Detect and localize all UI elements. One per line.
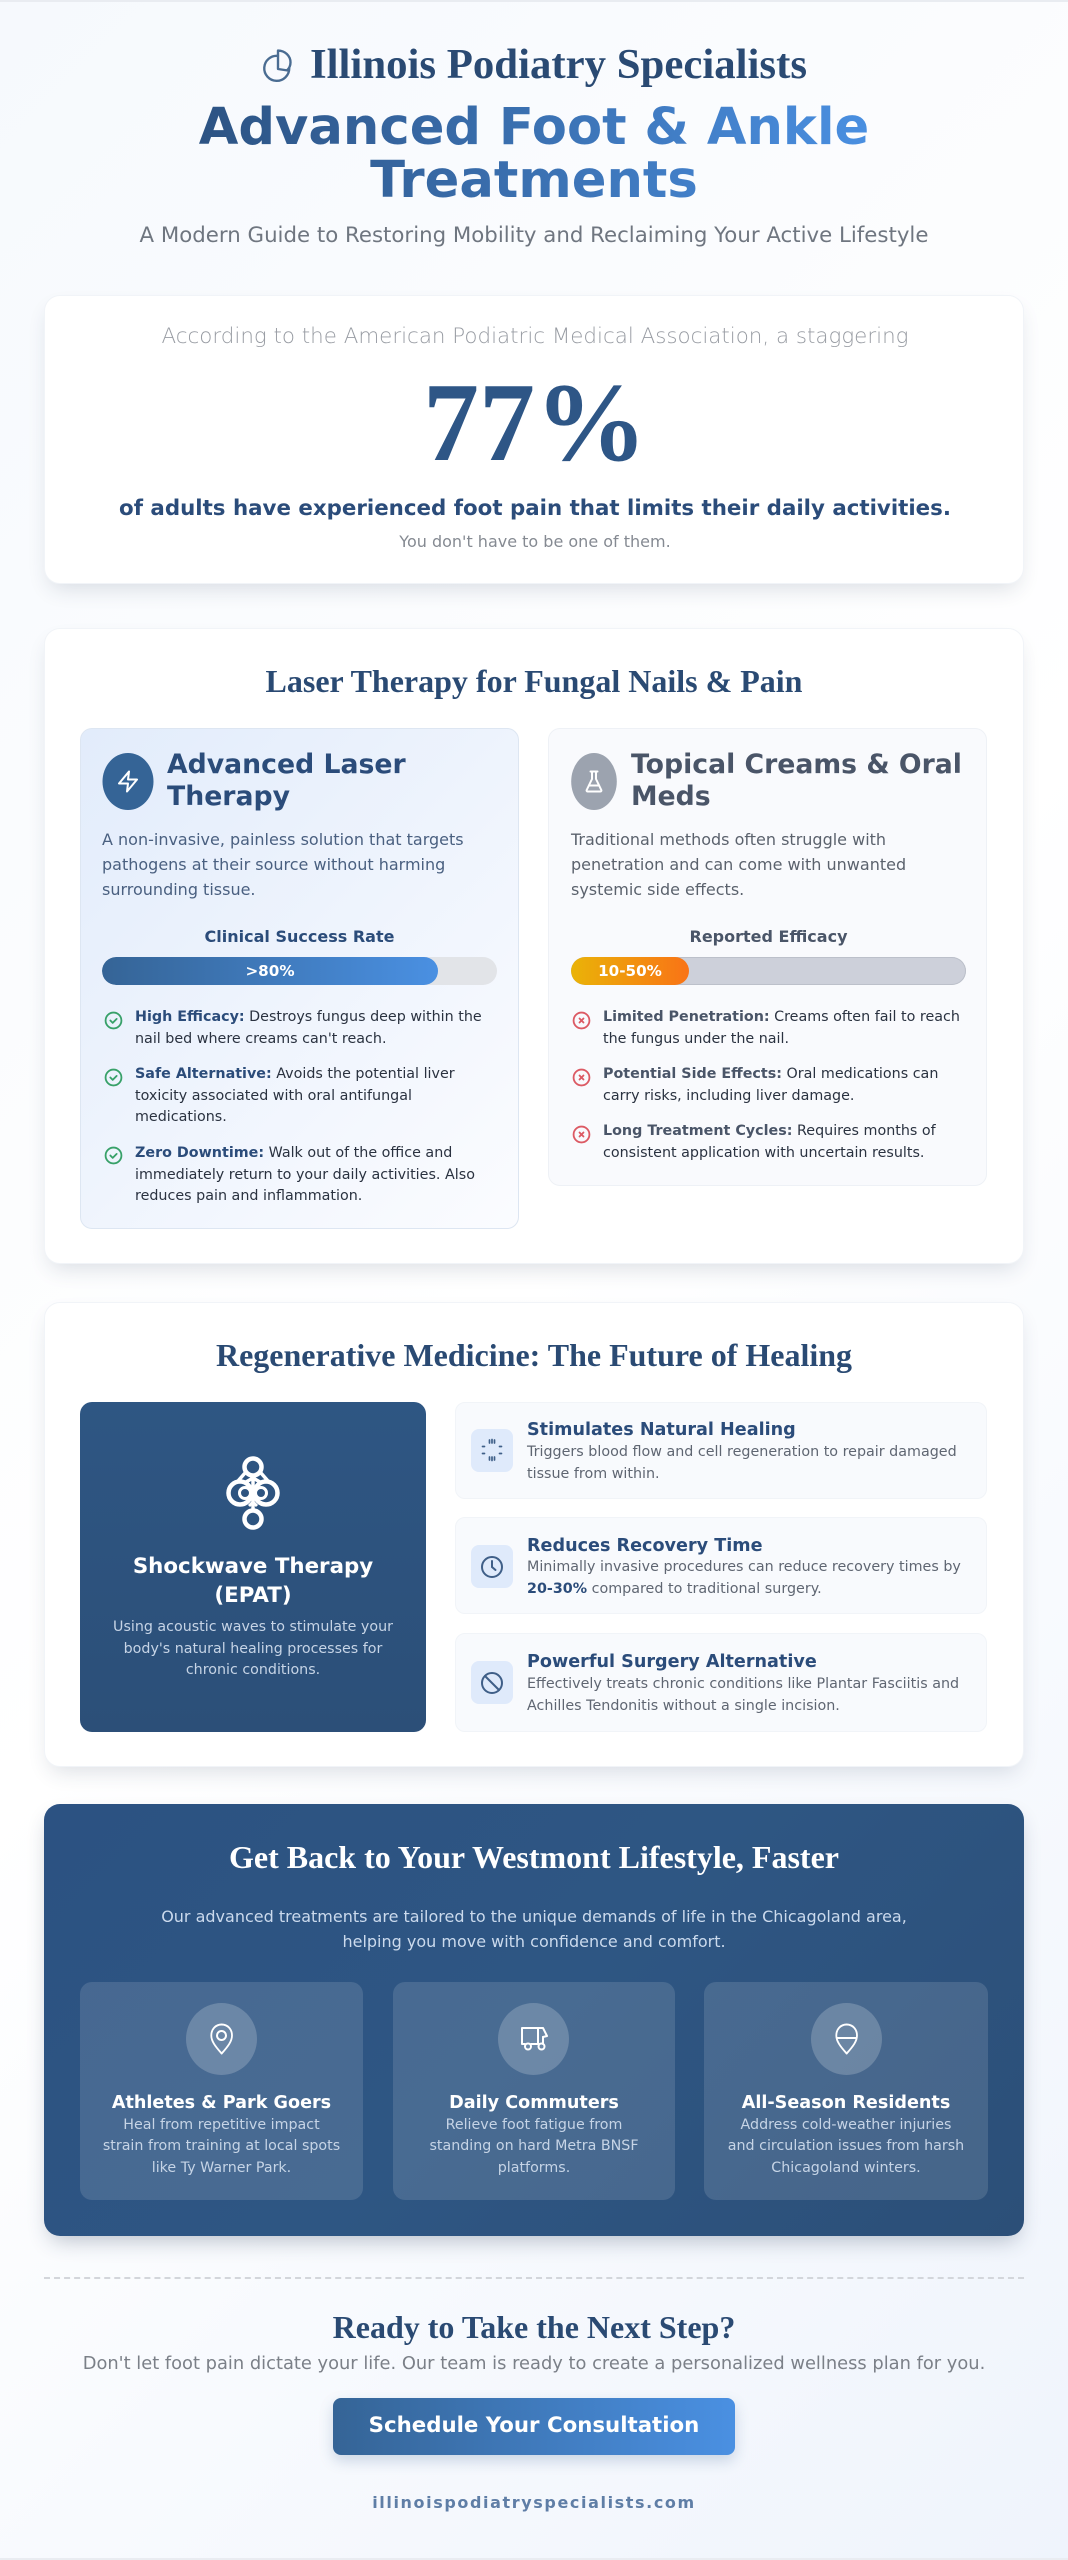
subtitle: A Modern Guide to Restoring Mobility and Reclaiming Your Active Lifestyle bbox=[140, 223, 928, 248]
text: zero downtime: Zero Downtime: Walk out of the office and bbox=[135, 1145, 452, 1161]
text: topical description bbox=[570, 830, 906, 899]
bar fill: 10-50% bbox=[571, 957, 689, 985]
text: residents title: All-Season Residents bbox=[742, 2093, 950, 2113]
main title: Advanced Foot & Ankle bbox=[199, 97, 869, 157]
icon: laser bolt bbox=[102, 753, 154, 810]
heading: shockwave therapy bbox=[133, 1554, 373, 1608]
text: healing description bbox=[526, 1444, 957, 1482]
text: shockwave description: body's natural healing processes for bbox=[124, 1641, 382, 1657]
text: long treatment cycles bbox=[603, 1123, 936, 1161]
icon: ban bbox=[471, 1661, 513, 1704]
text: surgery description: Achilles Tendonitis without a single incision. bbox=[527, 1698, 840, 1714]
text: topical description: Traditional methods often struggle with bbox=[571, 830, 886, 849]
heading: laser section: Laser Therapy for Fungal Nails & Pain bbox=[266, 663, 802, 699]
text: athletes description bbox=[103, 2117, 340, 2176]
text: shockwave description: chronic conditions. bbox=[186, 1662, 320, 1678]
main title bbox=[190, 101, 878, 206]
text: laser description: surrounding tissue. bbox=[102, 880, 256, 899]
text: potential side effects: carry risks, including liver damage. bbox=[603, 1088, 854, 1104]
text: safe alternative: medications. bbox=[135, 1109, 227, 1125]
heading: advanced laser: Advanced Laser bbox=[167, 749, 406, 780]
bar fill: over 80% bbox=[102, 957, 438, 985]
text: website: illinoispodiatryspecialists.com bbox=[372, 2493, 696, 2512]
panel: 77% statistic bbox=[44, 295, 1024, 584]
text: zero downtime: reduces pain and inflammation. bbox=[135, 1188, 362, 1204]
label: reported efficacy: Reported Efficacy bbox=[690, 927, 848, 946]
text: long treatment cycles: Long Treatment Cycles: Requires months of bbox=[603, 1123, 936, 1139]
text: residents description bbox=[728, 2117, 964, 2176]
text: limited penetration: the fungus under the nail. bbox=[603, 1031, 789, 1047]
text: limited penetration bbox=[603, 1009, 960, 1047]
icon: truck bbox=[498, 2003, 569, 2075]
text: high efficacy: nail bed where creams can't reach. bbox=[135, 1031, 387, 1047]
panel: powerful surgery alternative bbox=[455, 1633, 987, 1732]
text: athletes description: Heal from repetitive impact bbox=[123, 2117, 320, 2133]
bar: reported efficacy bbox=[571, 957, 966, 985]
text: long treatment cycles: consistent application with uncertain results. bbox=[603, 1145, 924, 1161]
stat note: You don't have to be one of them. bbox=[399, 532, 671, 551]
panel: topical creams and oral meds bbox=[548, 728, 987, 1186]
panel: commuters bbox=[393, 1982, 675, 2200]
text: high efficacy: High Efficacy: Destroys fungus deep within the bbox=[135, 1009, 482, 1025]
panel: athletes bbox=[80, 1982, 363, 2200]
big number: 77% bbox=[423, 361, 647, 485]
panel: advanced laser therapy bbox=[80, 728, 519, 1229]
text: laser description: A non-invasive, painless solution that targets bbox=[102, 830, 464, 849]
text: zero downtime: immediately return to your daily activities. Also bbox=[135, 1167, 475, 1183]
text: potential side effects bbox=[603, 1066, 938, 1104]
heading: regenerative medicine: Regenerative Medicine: The Future of Healing bbox=[216, 1337, 852, 1373]
text: residents description: Chicagoland winters. bbox=[771, 2160, 921, 2176]
text: commuters title: Daily Commuters bbox=[449, 2093, 619, 2113]
panel: shockwave therapy bbox=[80, 1402, 426, 1732]
text: high efficacy bbox=[135, 1009, 482, 1047]
panel: all-season residents bbox=[704, 1982, 988, 2200]
text: athletes description: strain from training at local spots bbox=[103, 2138, 340, 2154]
text: laser description: pathogens at their source without harming bbox=[102, 855, 445, 874]
text: westmont intro: helping you move with confidence and comfort. bbox=[342, 1932, 726, 1951]
text: recovery title: Reduces Recovery Time bbox=[527, 1536, 763, 1556]
stat caption: of adults have experienced foot pain that limits their daily activities. bbox=[119, 496, 951, 521]
text: athletes description: like Ty Warner Park. bbox=[152, 2160, 291, 2176]
panel: laser therapy section bbox=[44, 628, 1024, 1264]
stat intro: According to the American Podiatric Medical Association, a staggering bbox=[162, 324, 908, 349]
heading: advanced laser bbox=[167, 749, 406, 812]
icon: clock bbox=[471, 1545, 513, 1588]
panel: stimulates natural healing bbox=[455, 1402, 987, 1499]
icon: x 2 bbox=[572, 1068, 590, 1086]
icon: check 1 bbox=[104, 1012, 122, 1030]
text: zero downtime bbox=[135, 1145, 475, 1204]
panel: regenerative medicine section bbox=[44, 1302, 1024, 1767]
label: clinical success: Clinical Success Rate bbox=[205, 927, 394, 946]
button: schedule consultation: Schedule Your Consultation bbox=[369, 2413, 699, 2438]
text: athletes title: Athletes & Park Goers bbox=[112, 2093, 331, 2113]
text: limited penetration: Limited Penetration: Creams often fail to reach bbox=[603, 1009, 960, 1025]
heading: topical creams: Topical Creams & Oral bbox=[631, 749, 962, 780]
text: shockwave description: Using acoustic waves to stimulate your bbox=[113, 1619, 393, 1635]
text: commuters description: standing on hard Metra BNSF bbox=[429, 2138, 639, 2154]
heading: westmont: Get Back to Your Westmont Lifestyle, Faster bbox=[229, 1839, 839, 1875]
panel: reduces recovery time bbox=[455, 1517, 987, 1614]
icon: shockwave bbox=[226, 1456, 280, 1530]
text: commuters description: platforms. bbox=[498, 2160, 570, 2176]
text: topical description: systemic side effects. bbox=[571, 880, 744, 899]
button: schedule consultation bbox=[333, 2398, 735, 2455]
text: recovery description: 20-30% compared to traditional surgery. bbox=[527, 1581, 822, 1597]
heading: topical creams bbox=[631, 749, 962, 812]
icon: healing spinner bbox=[471, 1429, 513, 1472]
text: healing title: Stimulates Natural Healing bbox=[527, 1420, 796, 1440]
text: westmont intro bbox=[161, 1907, 907, 1951]
text: safe alternative bbox=[135, 1066, 455, 1125]
text: westmont intro: Our advanced treatments are tailored to the unique demands of life in the Chicagoland area, bbox=[161, 1907, 907, 1926]
heading: shockwave therapy: Shockwave Therapy bbox=[133, 1554, 373, 1579]
text: commuters description: Relieve foot fatigue from bbox=[446, 2117, 622, 2133]
text: potential side effects: Potential Side Effects: Oral medications can bbox=[603, 1066, 938, 1082]
bar fill: over 80%: >80% bbox=[245, 962, 295, 980]
text: residents description: Address cold-weather injuries bbox=[741, 2117, 951, 2133]
icon: location pin bbox=[186, 2003, 257, 2075]
bar fill: 10-50%: 10-50% bbox=[598, 962, 662, 980]
brand name: Illinois Podiatry Specialists bbox=[310, 41, 807, 88]
icon: check 3 bbox=[104, 1146, 122, 1164]
icon: brand logo bbox=[263, 49, 292, 82]
text: surgery title: Powerful Surgery Alternative bbox=[527, 1652, 817, 1672]
text: healing description: tissue from within. bbox=[527, 1466, 660, 1482]
icon: snow drop bbox=[811, 2003, 882, 2075]
text: surgery description bbox=[527, 1676, 959, 1714]
icon: flask bbox=[571, 753, 617, 810]
text: recovery description: Minimally invasive procedures can reduce recovery times by bbox=[527, 1559, 961, 1575]
icon: x 3 bbox=[572, 1126, 590, 1144]
panel: westmont lifestyle section bbox=[44, 1804, 1024, 2236]
heading: advanced laser: Therapy bbox=[167, 781, 290, 812]
text: safe alternative: toxicity associated with oral antifungal bbox=[135, 1088, 412, 1104]
text: topical description: penetration and can come with unwanted bbox=[571, 855, 906, 874]
text: recovery description bbox=[527, 1559, 961, 1597]
bar: success rate bbox=[102, 957, 497, 985]
text: shockwave description bbox=[113, 1619, 393, 1678]
heading: topical creams: Meds bbox=[631, 781, 711, 812]
text: healing description: Triggers blood flow and cell regeneration to repair damaged bbox=[527, 1444, 957, 1460]
text: commuters description bbox=[429, 2117, 639, 2176]
text: laser description bbox=[102, 830, 464, 899]
text: residents description: and circulation issues from harsh bbox=[728, 2138, 964, 2154]
heading: next step: Ready to Take the Next Step? bbox=[333, 2309, 735, 2345]
heading: shockwave therapy: (EPAT) bbox=[214, 1582, 292, 1608]
text: cta description: Don't let foot pain dictate your life. Our team is ready to create a personalized wellness plan for you. bbox=[83, 2353, 985, 2374]
icon: x 1 bbox=[572, 1012, 590, 1030]
text: safe alternative: Safe Alternative: Avoids the potential liver bbox=[135, 1066, 455, 1082]
main title: Treatments bbox=[370, 150, 698, 210]
text: surgery description: Effectively treats chronic conditions like Plantar Fasciitis and bbox=[527, 1676, 959, 1692]
icon: check 2 bbox=[104, 1068, 122, 1086]
